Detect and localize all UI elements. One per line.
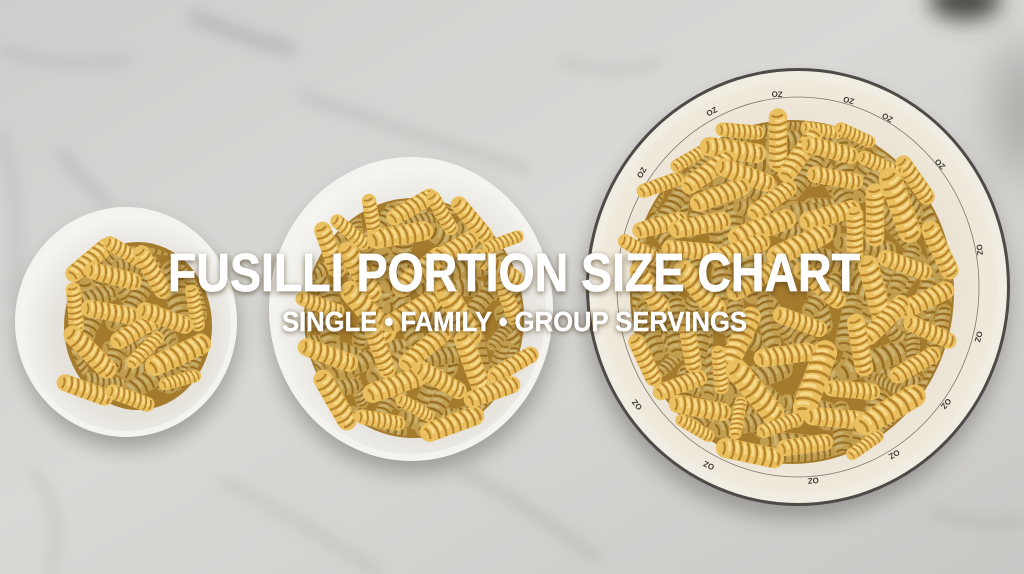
small bowl: single serving bbox=[15, 207, 252, 438]
measurement ring: OZ bbox=[807, 476, 819, 485]
measurement ring: OZ bbox=[771, 90, 783, 99]
measurement ring: OZ bbox=[630, 397, 644, 412]
title: FUSILLI PORTION SIZE CHART bbox=[168, 243, 860, 303]
measurement ring: OZ bbox=[705, 105, 719, 118]
measurement ring: OZ bbox=[887, 447, 901, 461]
pasta: small bowl bbox=[56, 236, 212, 412]
measurement ring: OZ bbox=[973, 330, 984, 343]
measurement ring: OZ bbox=[880, 111, 894, 125]
subtitle: SINGLE • FAMILY • GROUP SERVINGS bbox=[282, 306, 747, 337]
pasta: large bowl bbox=[618, 108, 959, 468]
measurement ring: OZ bbox=[842, 95, 855, 106]
measurement ring: OZ bbox=[933, 157, 947, 171]
measurement ring: OZ bbox=[975, 244, 984, 256]
pasta: medium bowl bbox=[295, 188, 539, 442]
measurement ring bbox=[617, 90, 984, 485]
measurement ring: OZ bbox=[702, 459, 716, 472]
measurement ring: OZ bbox=[939, 396, 953, 411]
medium bowl: family serving bbox=[269, 157, 553, 461]
bowl shadows bbox=[18, 82, 1008, 518]
measurement ring: OZ bbox=[635, 166, 649, 180]
large bowl: group serving bbox=[586, 68, 1010, 506]
